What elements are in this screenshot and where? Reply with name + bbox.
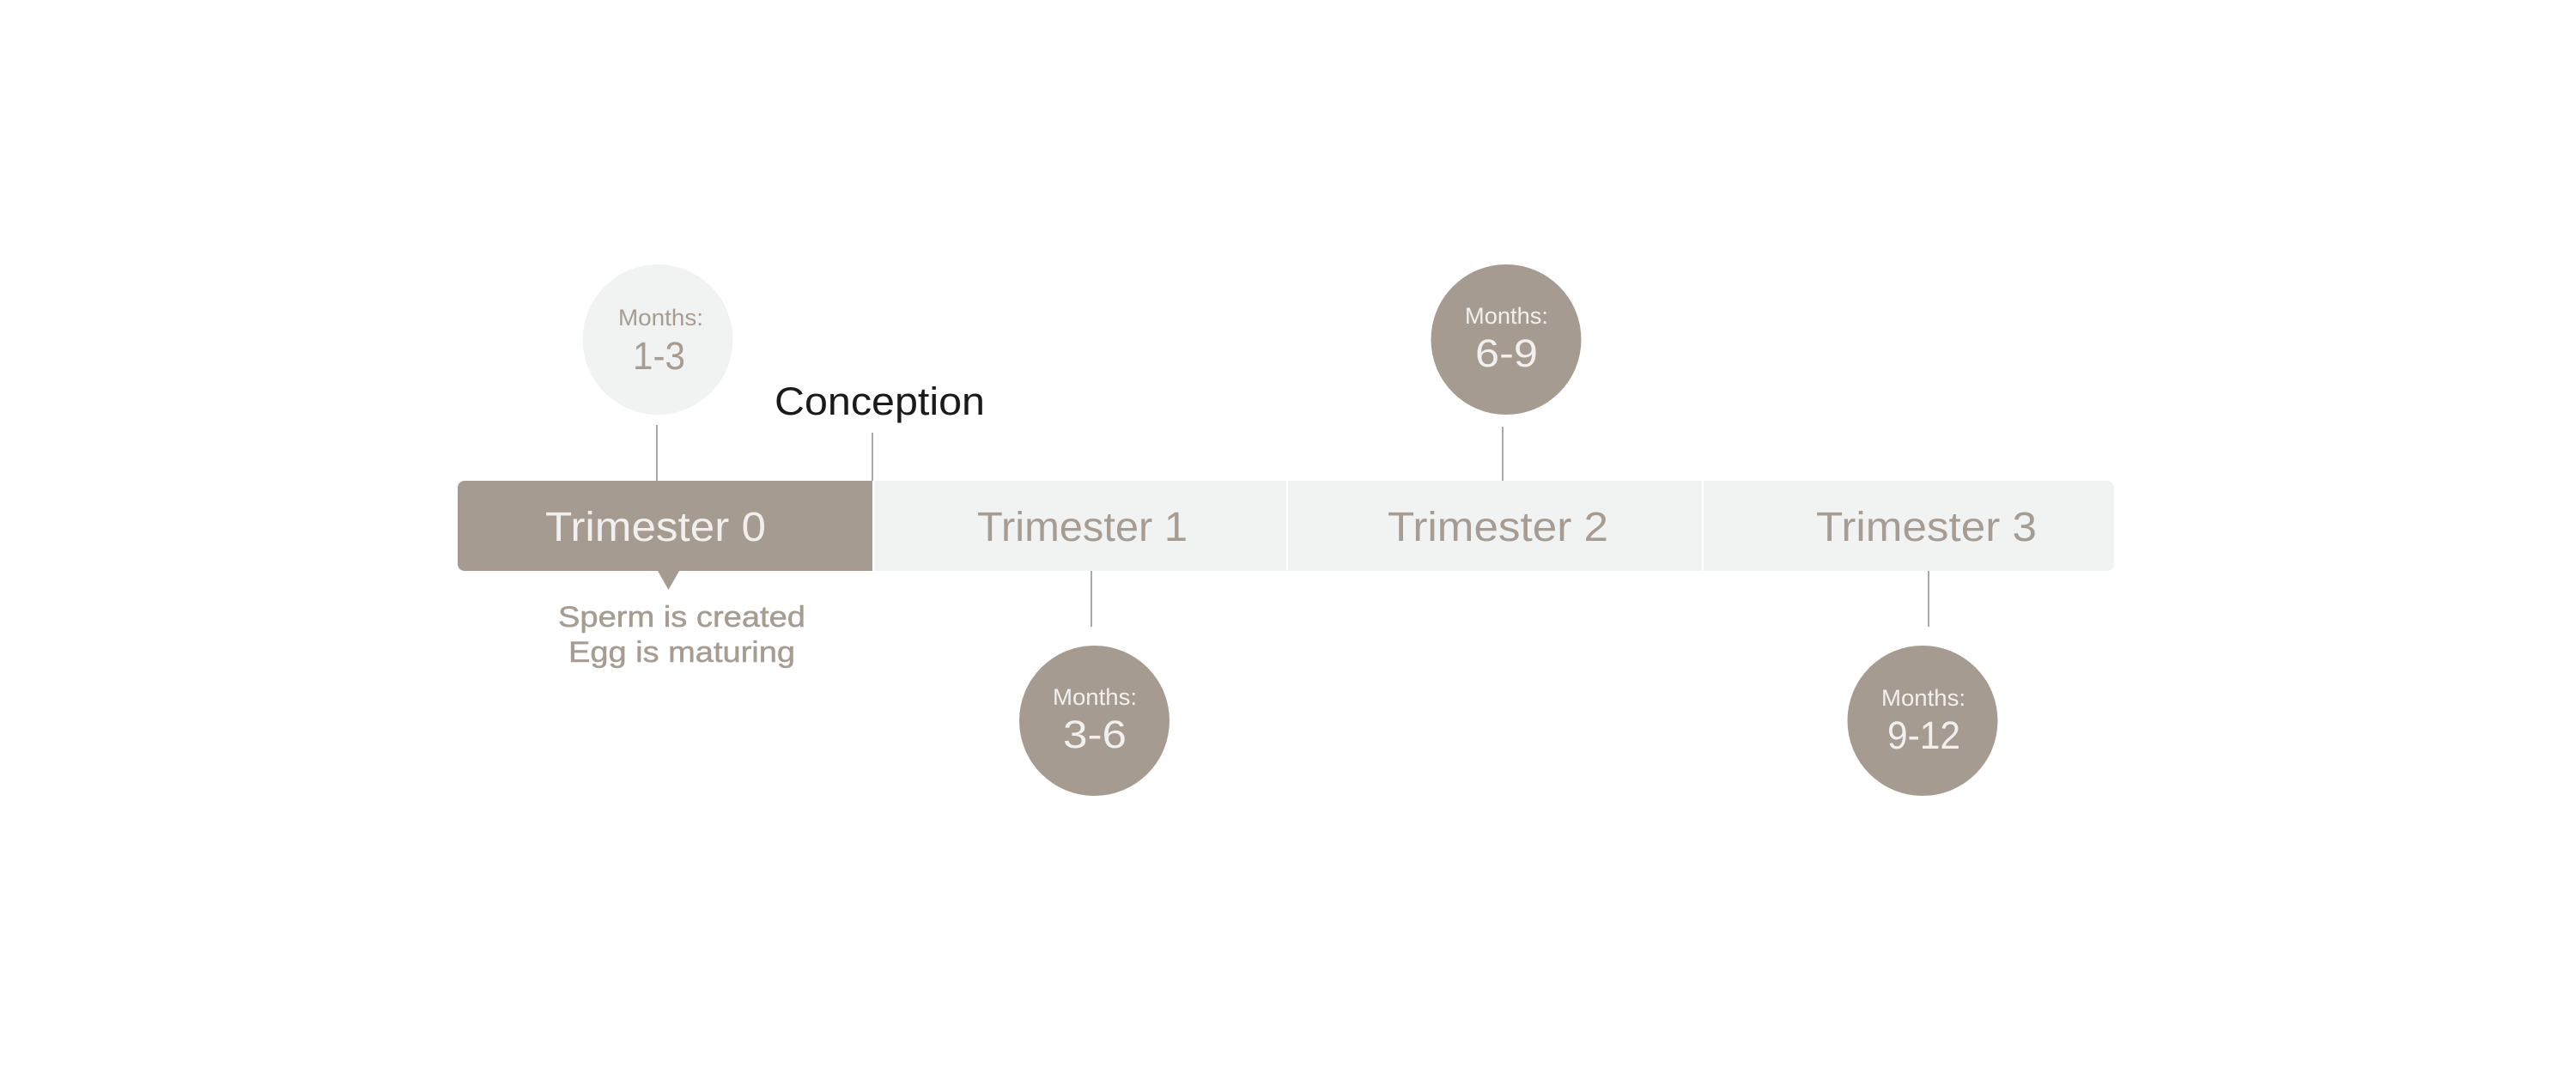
timeline bar — [458, 481, 2114, 571]
segment: Trimester 1: Trimester 1 — [977, 505, 1188, 550]
segment: Trimester 0: Trimester 0 — [545, 505, 766, 550]
callout: Trimester 0 description: Egg is maturing — [568, 636, 795, 669]
circle: months 1-3: Months: — [618, 305, 703, 331]
circle: months 1-3 — [582, 264, 733, 415]
callout: Trimester 0 description: Sperm is created — [558, 601, 805, 634]
callout: Trimester 0 description — [558, 601, 805, 669]
connector: months 9-12 — [1928, 571, 1929, 627]
segment: Trimester 2 — [1288, 481, 1702, 571]
circle: months 9-12: 9-12 — [1887, 713, 1960, 757]
connector: months 3-6 — [1091, 571, 1092, 627]
marker line: Conception — [872, 433, 873, 481]
connector: months 1-3 — [656, 425, 658, 481]
circle: months 3-6 — [1019, 646, 1170, 796]
connector: months 6-9 — [1502, 427, 1504, 481]
segment: Trimester 3: Trimester 3 — [1816, 505, 2037, 550]
circle: months 9-12 — [1848, 646, 1997, 796]
segment: Trimester 2: Trimester 2 — [1388, 505, 1608, 550]
label: Conception: Conception — [775, 379, 985, 423]
pointer under Trimester 0 — [658, 571, 679, 590]
circle: months 3-6: Months: — [1053, 684, 1137, 710]
segment: Trimester 0 — [458, 481, 872, 571]
circle: months 9-12: Months: — [1881, 685, 1965, 711]
circle: months 3-6: 3-6 — [1063, 713, 1127, 756]
circle: months 6-9: Months: — [1465, 303, 1548, 329]
circle: months 6-9: 6-9 — [1475, 331, 1538, 375]
circle: months 6-9 — [1431, 264, 1582, 415]
segment: Trimester 1 — [874, 481, 1286, 571]
circle: months 1-3: 1-3 — [633, 334, 685, 378]
segment: Trimester 3 — [1704, 481, 2114, 571]
